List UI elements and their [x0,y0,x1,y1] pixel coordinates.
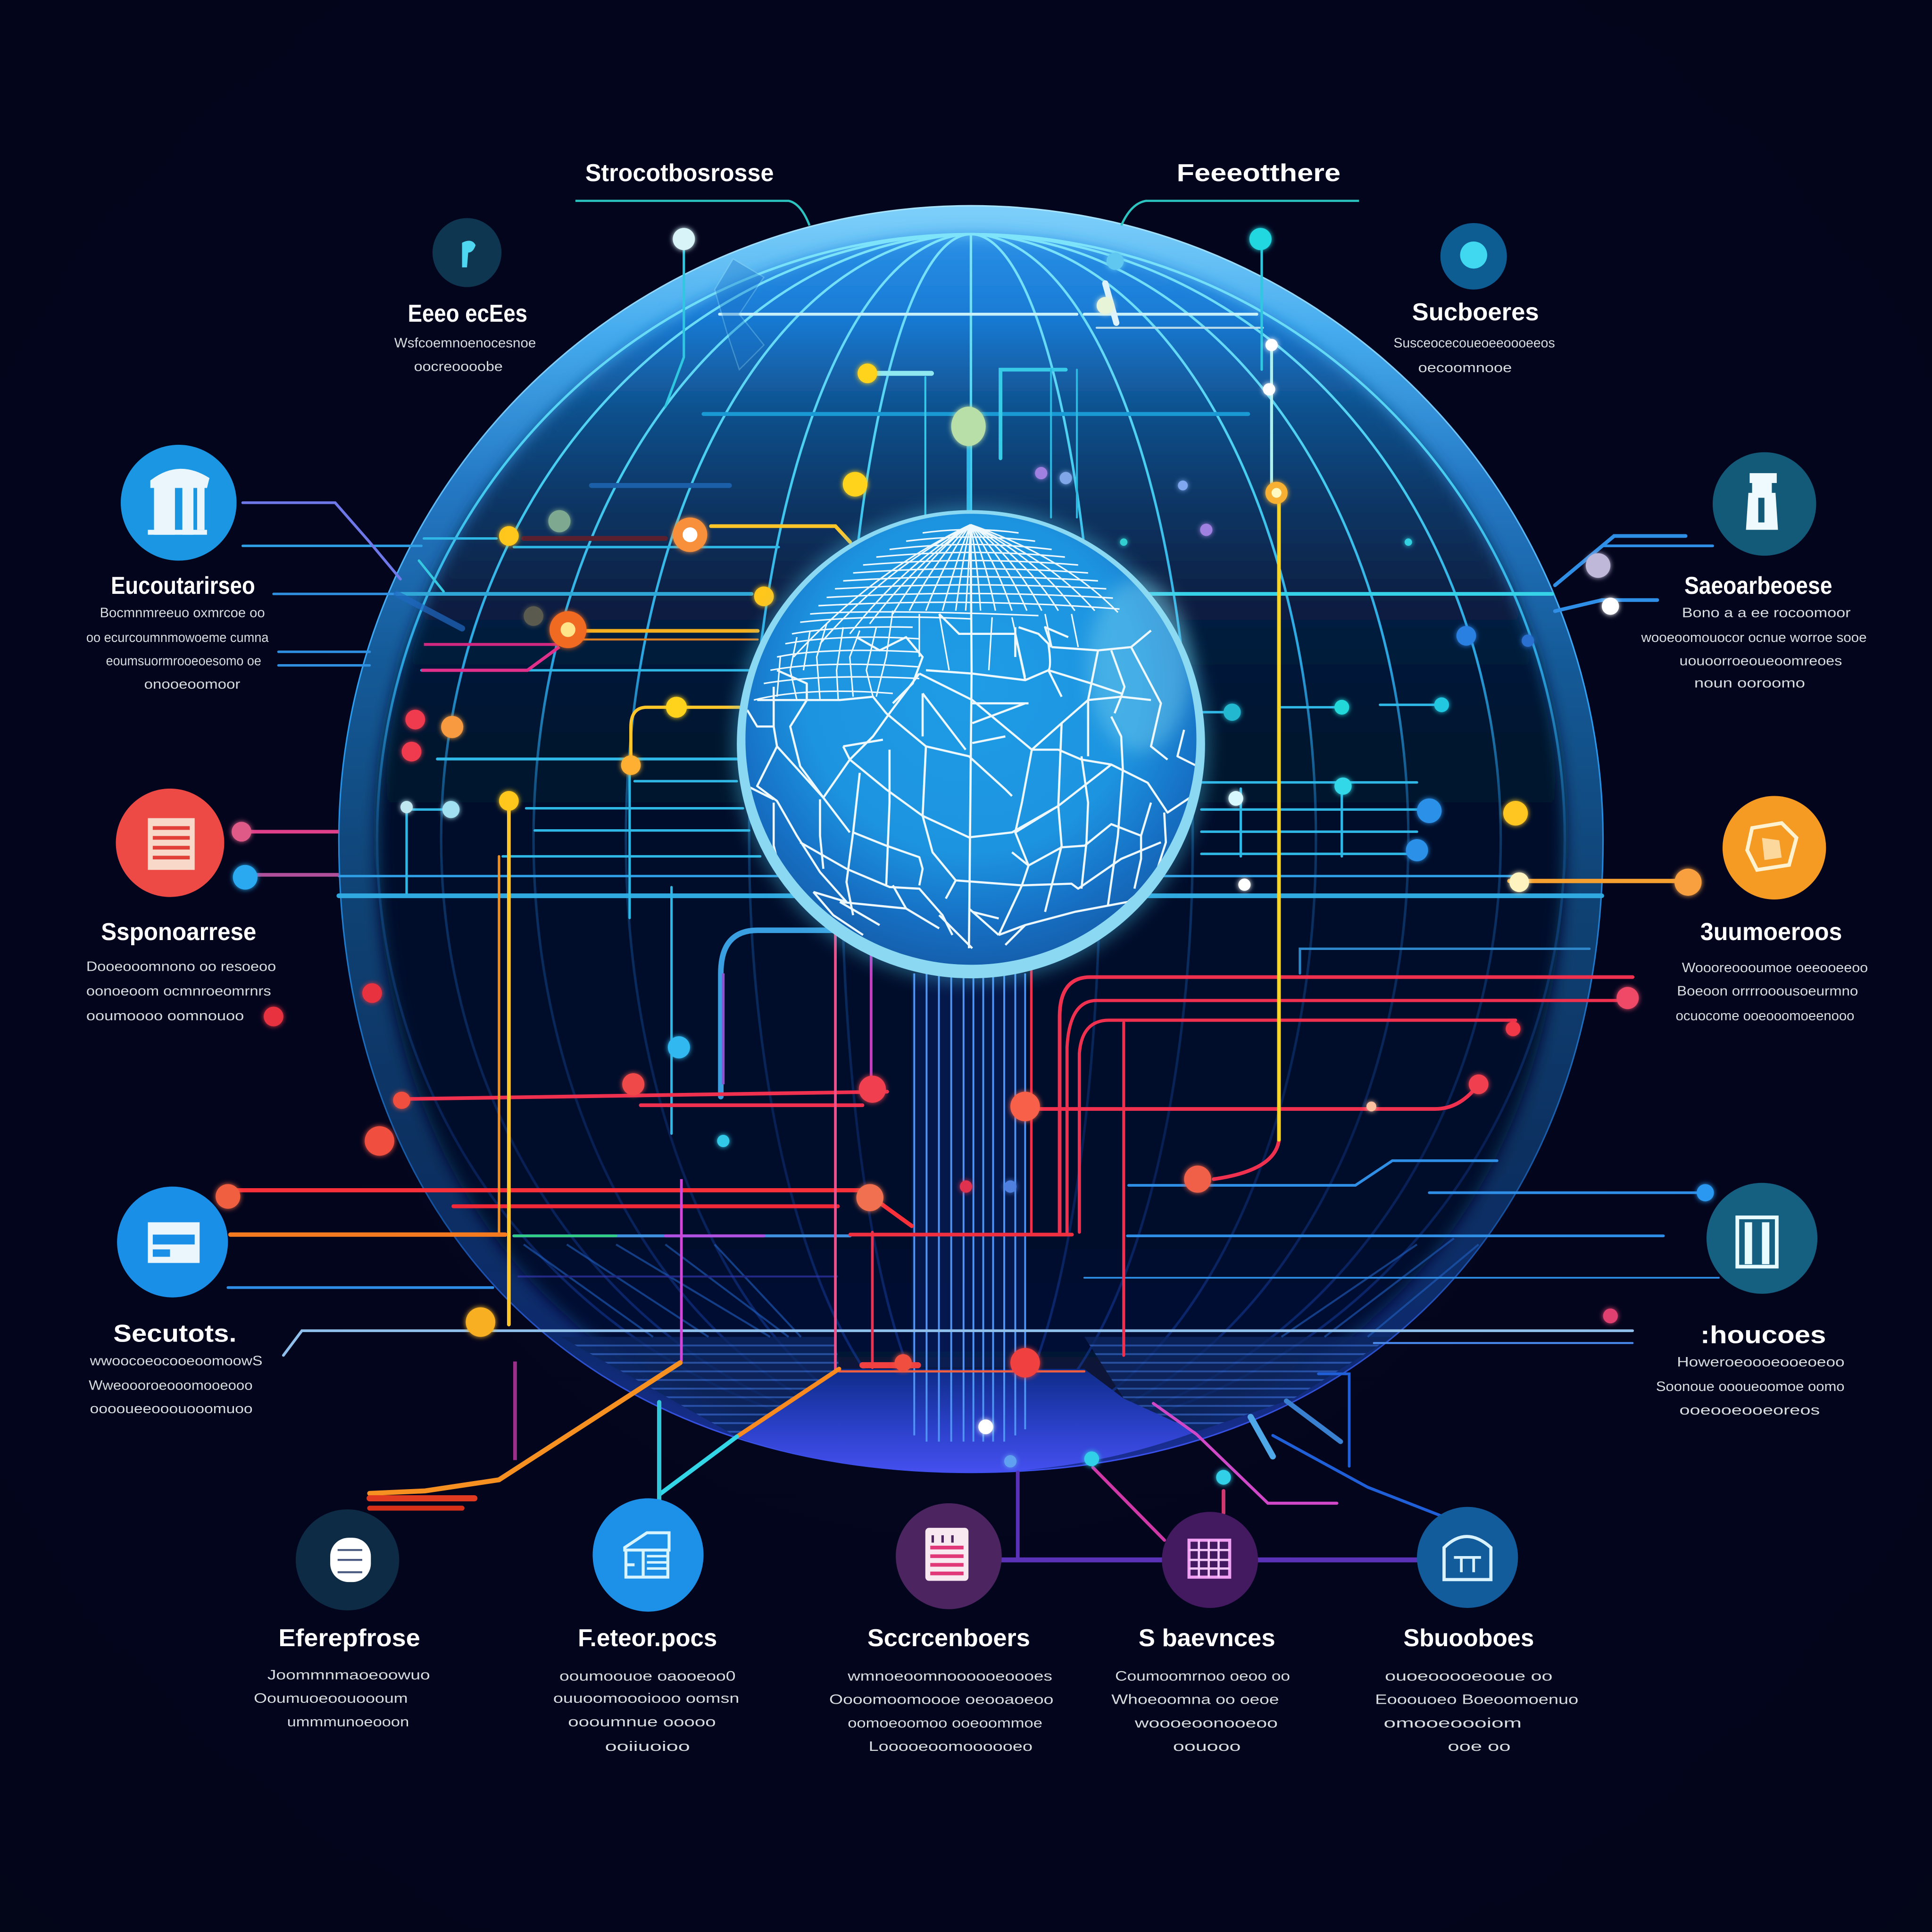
text: bottom block 2: ouuoomoooiooo oomsn [553,1691,739,1706]
text: bottom block 3: Looooeoomoooooeo [869,1739,1033,1754]
text: top right: Susceocecoueoeeoooeeos [1393,336,1555,351]
text: left block 2 [86,918,276,1024]
text: left block 1 [86,572,268,692]
text: left block 1: Eucoutarirseo [111,572,255,600]
text: bottom block 3: oomoeoomoo ooeoommoe [848,1715,1042,1731]
icon: left building 1 [121,445,237,561]
text: right block 1: wooeoomouocor ocnue worroe sooe [1641,630,1867,645]
text: right block 3: ooeooeooeoreos [1679,1403,1820,1418]
text: top right [1393,299,1555,375]
text: right block 1: Bono a a ee rocoomoor [1682,606,1851,621]
outer sphere [339,206,1603,1473]
text: top left: Eeeo ecEes [408,300,527,327]
text: right block 1: uouoorroeoueoomreoes [1679,654,1842,669]
text: bottom block 4: Coumoomrnoo oeoo oo [1115,1669,1290,1684]
text: bottom block 5: Eooouoeo Boeoomoenuo [1375,1692,1578,1707]
icon: right building teal [1707,1183,1817,1294]
text: right block 3: Howeroeoooeooeoeoo [1677,1355,1845,1370]
text: bottom block 4: woooeoonooeoo [1134,1715,1278,1731]
text: bottom block 4 [1111,1624,1290,1754]
icon: left card red [116,789,224,897]
top left heading: Strocotbosrosse [585,159,774,187]
text: bottom block 4: oouooo [1173,1739,1241,1754]
lower meridians [517,1238,1479,1337]
blue outer lines [228,503,1719,1516]
icon: bottom node 3 [896,1503,1002,1609]
upper sphere structures [591,259,1272,517]
top right heading: Feeeotthere [1177,159,1341,187]
text: top left: Wsfcoemnoenocesnoe [394,336,536,351]
text: top right: oecoomnooe [1418,360,1512,375]
text: bottom block 3 [829,1624,1053,1754]
base dome [737,1369,1196,1473]
icon: right column 1 [1713,452,1816,556]
text: left block 3: Secutots. [113,1320,237,1348]
text: top left: oocreoooobe [414,359,503,374]
text: right block 2: ocuocome ooeooomoeenooo [1676,1008,1854,1024]
icon: bottom node 4 [1162,1512,1258,1608]
text: bottom block 3: Oooomoomoooe oeooaoeoo [829,1692,1053,1707]
icon: right orange [1723,796,1826,899]
inner globe glow [733,507,1209,982]
text: top right: Sucboeres [1412,299,1539,326]
text: bottom block 3: Sccrcenboers [867,1624,1030,1652]
text: bottom block 1 [254,1624,430,1730]
text: left block 1: eoumsuormrooeoesomo oe [106,654,261,669]
text: bottom block 5: ooe oo [1448,1739,1511,1754]
text: top left [394,300,536,374]
icon: top left node [433,218,501,287]
text: bottom block 4: S baevnces [1139,1624,1275,1652]
text: bottom block 2 [553,1624,739,1754]
text: right block 1: Saeoarbeoese [1684,572,1832,600]
icon: top right node [1441,223,1507,290]
top right heading [1121,159,1359,225]
globe fine mesh [754,525,1120,700]
text: bottom block 1: Joommnmaoeoowuo [267,1667,430,1682]
bottom connector ribbons [370,1363,1417,1560]
text: right block 2: Woooreoooumoe oeeooeeoo [1682,960,1868,975]
text: right block 1 [1641,572,1867,691]
red network lines [228,936,1632,1371]
stem lines [914,974,1025,1441]
text: right block 1: noun ooroomo [1694,676,1805,691]
text: right block 2: 3uumoeroos [1700,918,1842,946]
text: bottom block 2: ooiiuoioo [605,1739,690,1754]
text: bottom block 5 [1375,1624,1578,1754]
text: bottom block 3: wmnoeoomnoooooeoooes [847,1669,1052,1684]
text: left block 2: Dooeooomnono oo resoeoo [86,959,276,974]
text: right block 2: Boeoon orrrrooousoeurmno [1677,984,1858,999]
icon: bottom node 2 [592,1498,704,1612]
text: left block 2: ooumoooo oomnouoo [86,1008,244,1024]
text: right block 2 [1676,918,1868,1024]
text: right block 3: Soonoue oooueoomoe oomo [1656,1379,1845,1394]
text: right block 3: :houcoes [1700,1321,1826,1349]
globe crack network [747,525,1197,948]
text: left block 1: onooeoomoor [144,677,241,692]
inner globe [737,510,1205,978]
text: bottom block 1: Ooumuoeoouoooum [254,1691,408,1706]
text: left block 1: Bocmnmreeuo oxmrcoe oo [100,606,265,621]
sphere meridian grid [377,234,1565,1444]
top left heading [575,159,809,225]
node dots [216,228,1714,1485]
text: bottom block 1: Eferepfrose [278,1624,420,1652]
text: left block 1: oo ecurcoumnmowoeme cumna [86,630,268,645]
cyan network lines [243,240,1602,1133]
text: right block 3 [1656,1321,1845,1418]
stem [912,974,1025,1368]
text: bottom block 5: Sbuooboes [1403,1624,1534,1652]
text: left block 2: Ssponoarrese [101,918,256,946]
magenta lines [234,644,871,1460]
text: bottom block 1: ummmunoeooon [287,1715,409,1730]
text: bottom block 4: Whoeoomna oo oeoe [1111,1692,1279,1707]
text: left block 3: wwoocoeocooeoomoowS [90,1353,262,1368]
icon: left card blue [117,1187,228,1298]
orange and yellow lines [230,493,1688,1324]
text: left block 3: Wweoooroeooomooeooo [89,1378,253,1393]
icon: bottom node 5 [1417,1507,1518,1608]
text: bottom block 5: omooeoooiom [1384,1715,1522,1731]
text: left block 3 [89,1320,262,1416]
lower sphere wave panels [555,1337,1405,1437]
text: left block 2: oonoeoom ocmnroeomrnrs [86,984,271,999]
text: bottom block 5: ouoeooooeooue oo [1385,1669,1552,1684]
text: bottom block 2: ooumoouoe oaooeoo0 [559,1669,736,1684]
icon: bottom node 1 [296,1509,399,1610]
text: bottom block 2: F.eteor.pocs [578,1624,717,1652]
text: left block 3: ooooueeooouooomuoo [90,1401,253,1416]
text: bottom block 2: oooumnue ooooo [568,1715,716,1730]
